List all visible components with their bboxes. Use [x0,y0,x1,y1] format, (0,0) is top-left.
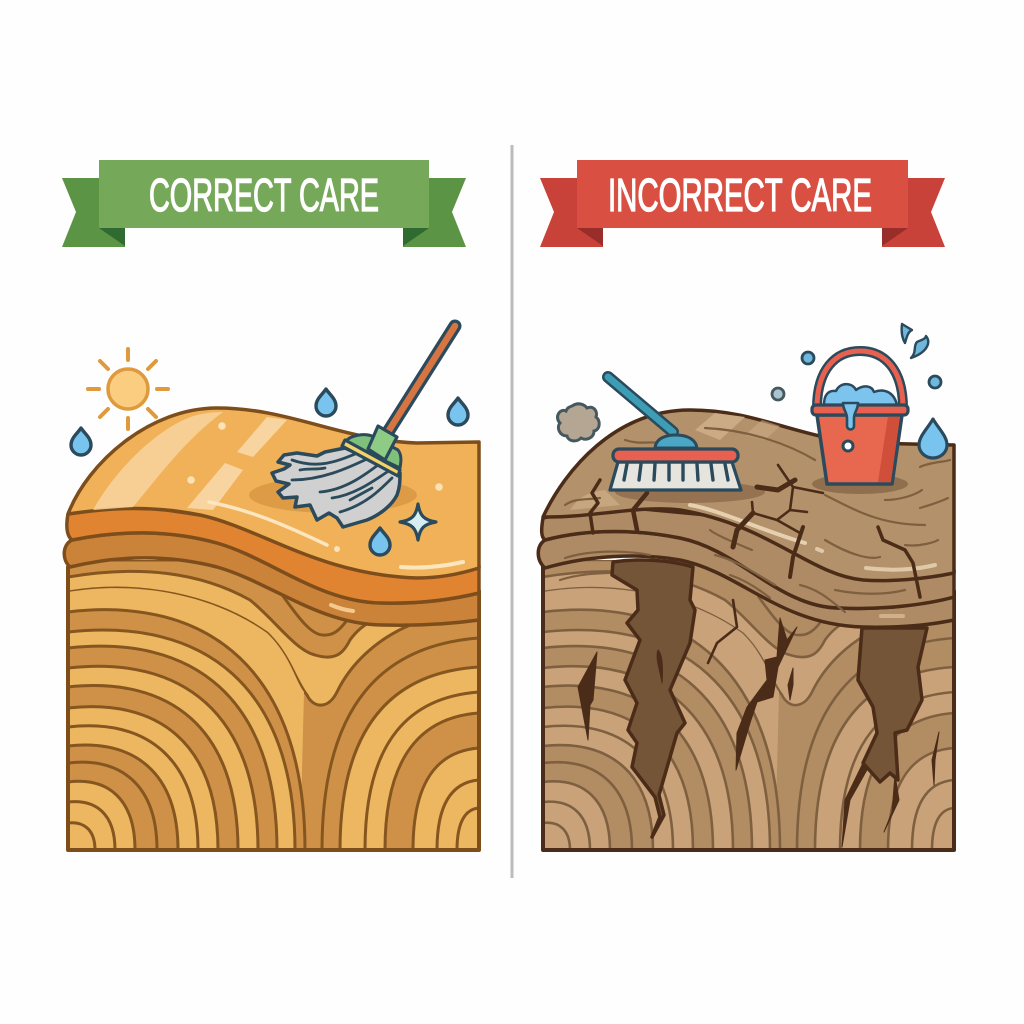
glossy top surface [68,408,479,578]
faded gloss [570,413,780,510]
bucket rim [812,405,908,415]
mop bar [342,440,400,476]
brush dome [655,435,697,448]
brush handle [608,377,673,432]
crack: tails and splits [578,618,939,847]
bucket handle [817,351,903,408]
under layer [538,532,954,627]
icon: soap droplets [772,324,947,458]
icon: dirt clump [558,404,599,441]
brush shadow [615,481,765,503]
worn top surface [543,410,954,581]
icon: water drops [71,389,468,555]
mop handle [388,326,455,432]
icon: soapy bucket [812,351,908,484]
bucket body [817,415,902,484]
panel: damaged wood floor [538,410,954,850]
orange finish layer [67,505,479,603]
crack: large right gouge [858,628,927,782]
bucket hole [843,441,853,451]
panel: healthy wood floor [64,408,479,850]
icon: mop [272,326,455,527]
crack: large left gouge [612,560,695,837]
surface grain lines [560,428,950,612]
mop shadow [249,477,417,513]
bucket shadow [812,474,908,494]
damaged grain cross-section [543,560,954,850]
icon: sun [88,349,168,429]
brush block [613,449,738,462]
banner: correct care [62,160,466,247]
mop cap [345,435,401,468]
wood grain cross-section [68,560,479,850]
icon: scrub brush [608,377,741,490]
under layer [64,533,479,625]
mop ferrule [368,426,397,460]
icon: sparkle [400,504,436,540]
center divider [510,145,514,878]
foam drip [843,403,858,430]
banner: incorrect care [540,160,945,247]
mop strands [272,448,400,527]
gloss reflections [93,412,443,552]
foam [824,384,897,405]
bristles [610,462,741,490]
worn finish layer [542,505,954,608]
heading: incorrect care: INCORRECT CARE [608,169,872,221]
crack: thin branches [590,465,920,663]
heading: correct care: CORRECT CARE [149,169,379,221]
